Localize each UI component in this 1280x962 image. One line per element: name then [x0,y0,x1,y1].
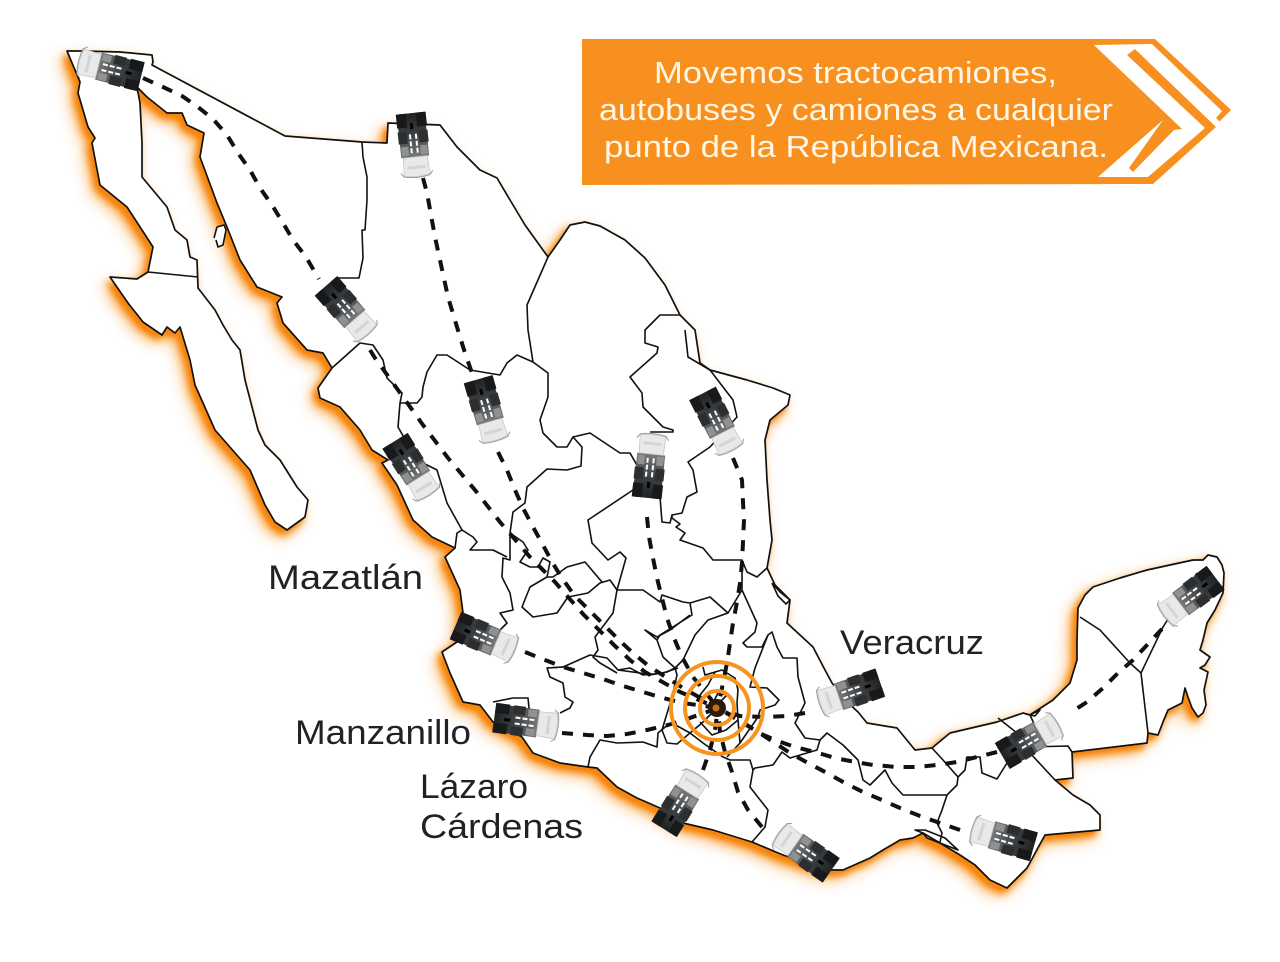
label: Manzanillo: Manzanillo [295,714,471,752]
label: Lázaro Cárdenas: Cárdenas [420,808,583,846]
label: Mazatlán: Mazatlán [268,559,423,597]
icon: truck Sonora [314,275,380,345]
target rings over Mexico City [671,662,763,754]
icon: truck Chiapas [967,814,1038,862]
icon: truck Tijuana [75,46,145,92]
icon: truck Sinaloa [381,432,443,504]
icon: truck Chihuahua south [463,375,511,446]
icon: truck Oaxaca coast [769,820,840,883]
icon: truck Veracruz [814,667,885,719]
icon: truck Tabasco [994,710,1066,770]
map: Mexico outline [67,51,1224,888]
icon: truck Quintana Roo [1154,565,1225,629]
icon: truck Manzanillo [492,702,560,742]
icon: truck Nuevo León [688,386,746,458]
label: Lázaro Cárdenas: Lázaro [420,768,528,806]
banner text [599,55,1113,164]
icon: central hub [708,699,726,717]
icon: truck Coahuila [631,432,669,499]
icon: truck Ciudad Juárez [395,112,433,179]
banner text: Movemos tractocamiones, [654,55,1057,90]
map: state borders [148,142,1197,850]
icon: truck Mazatlán [449,611,521,665]
banner text: autobuses y camiones a cualquier [599,92,1113,127]
label: Veracruz: Veracruz [840,624,984,662]
map: coastal orange glow [60,56,1220,896]
icon: truck Lázaro Cárdenas [650,766,712,838]
banner: orange arrow callout [582,39,1231,185]
routes: dashed lines to Mexico City [143,78,1162,830]
label: Lázaro Cárdenas [420,768,583,846]
banner text: punto de la República Mexicana. [604,129,1108,164]
